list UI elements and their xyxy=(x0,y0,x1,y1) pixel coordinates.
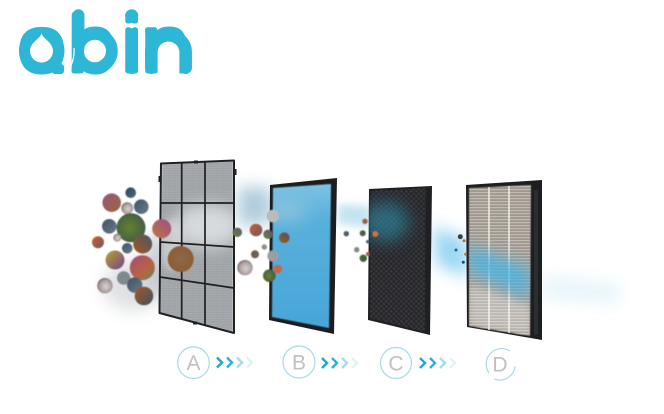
stage label D: D xyxy=(492,354,508,376)
filter B: blue HEPA panel xyxy=(269,178,337,334)
logo counters xyxy=(84,23,179,76)
blue glow on filter C xyxy=(361,202,409,242)
filter D: pleated HEPA panel xyxy=(466,180,542,340)
mist over filter B xyxy=(261,200,309,224)
stage label C xyxy=(380,348,412,378)
logo: obin xyxy=(19,1,189,88)
logo: obin: i xyxy=(122,1,141,88)
stage label C: C xyxy=(388,352,404,376)
arrows C to D xyxy=(420,358,455,368)
particles: before filter B xyxy=(233,210,290,282)
logo: obin: n xyxy=(142,1,189,88)
blue glow on filter D xyxy=(466,245,531,336)
particles: before filter C xyxy=(344,219,378,262)
stage label B: B xyxy=(292,352,306,374)
particles: before filter A xyxy=(92,187,194,305)
logo: obin: o xyxy=(19,1,65,88)
arrows A to B xyxy=(217,358,252,368)
stage label A xyxy=(178,347,209,379)
frame of filter A xyxy=(160,160,235,333)
stage label D xyxy=(486,349,515,380)
arrows B to C xyxy=(322,358,357,368)
filter A: pre-filter mesh xyxy=(160,160,242,333)
stage label A: A xyxy=(186,352,201,375)
logo: obin: b xyxy=(69,1,115,88)
mist over filter A xyxy=(160,204,242,271)
icon: logo droplet xyxy=(30,33,53,62)
particles: before filter D xyxy=(454,234,467,264)
stage label B xyxy=(283,346,315,378)
air flow stream xyxy=(103,186,618,311)
filter C: activated carbon panel xyxy=(361,186,432,335)
